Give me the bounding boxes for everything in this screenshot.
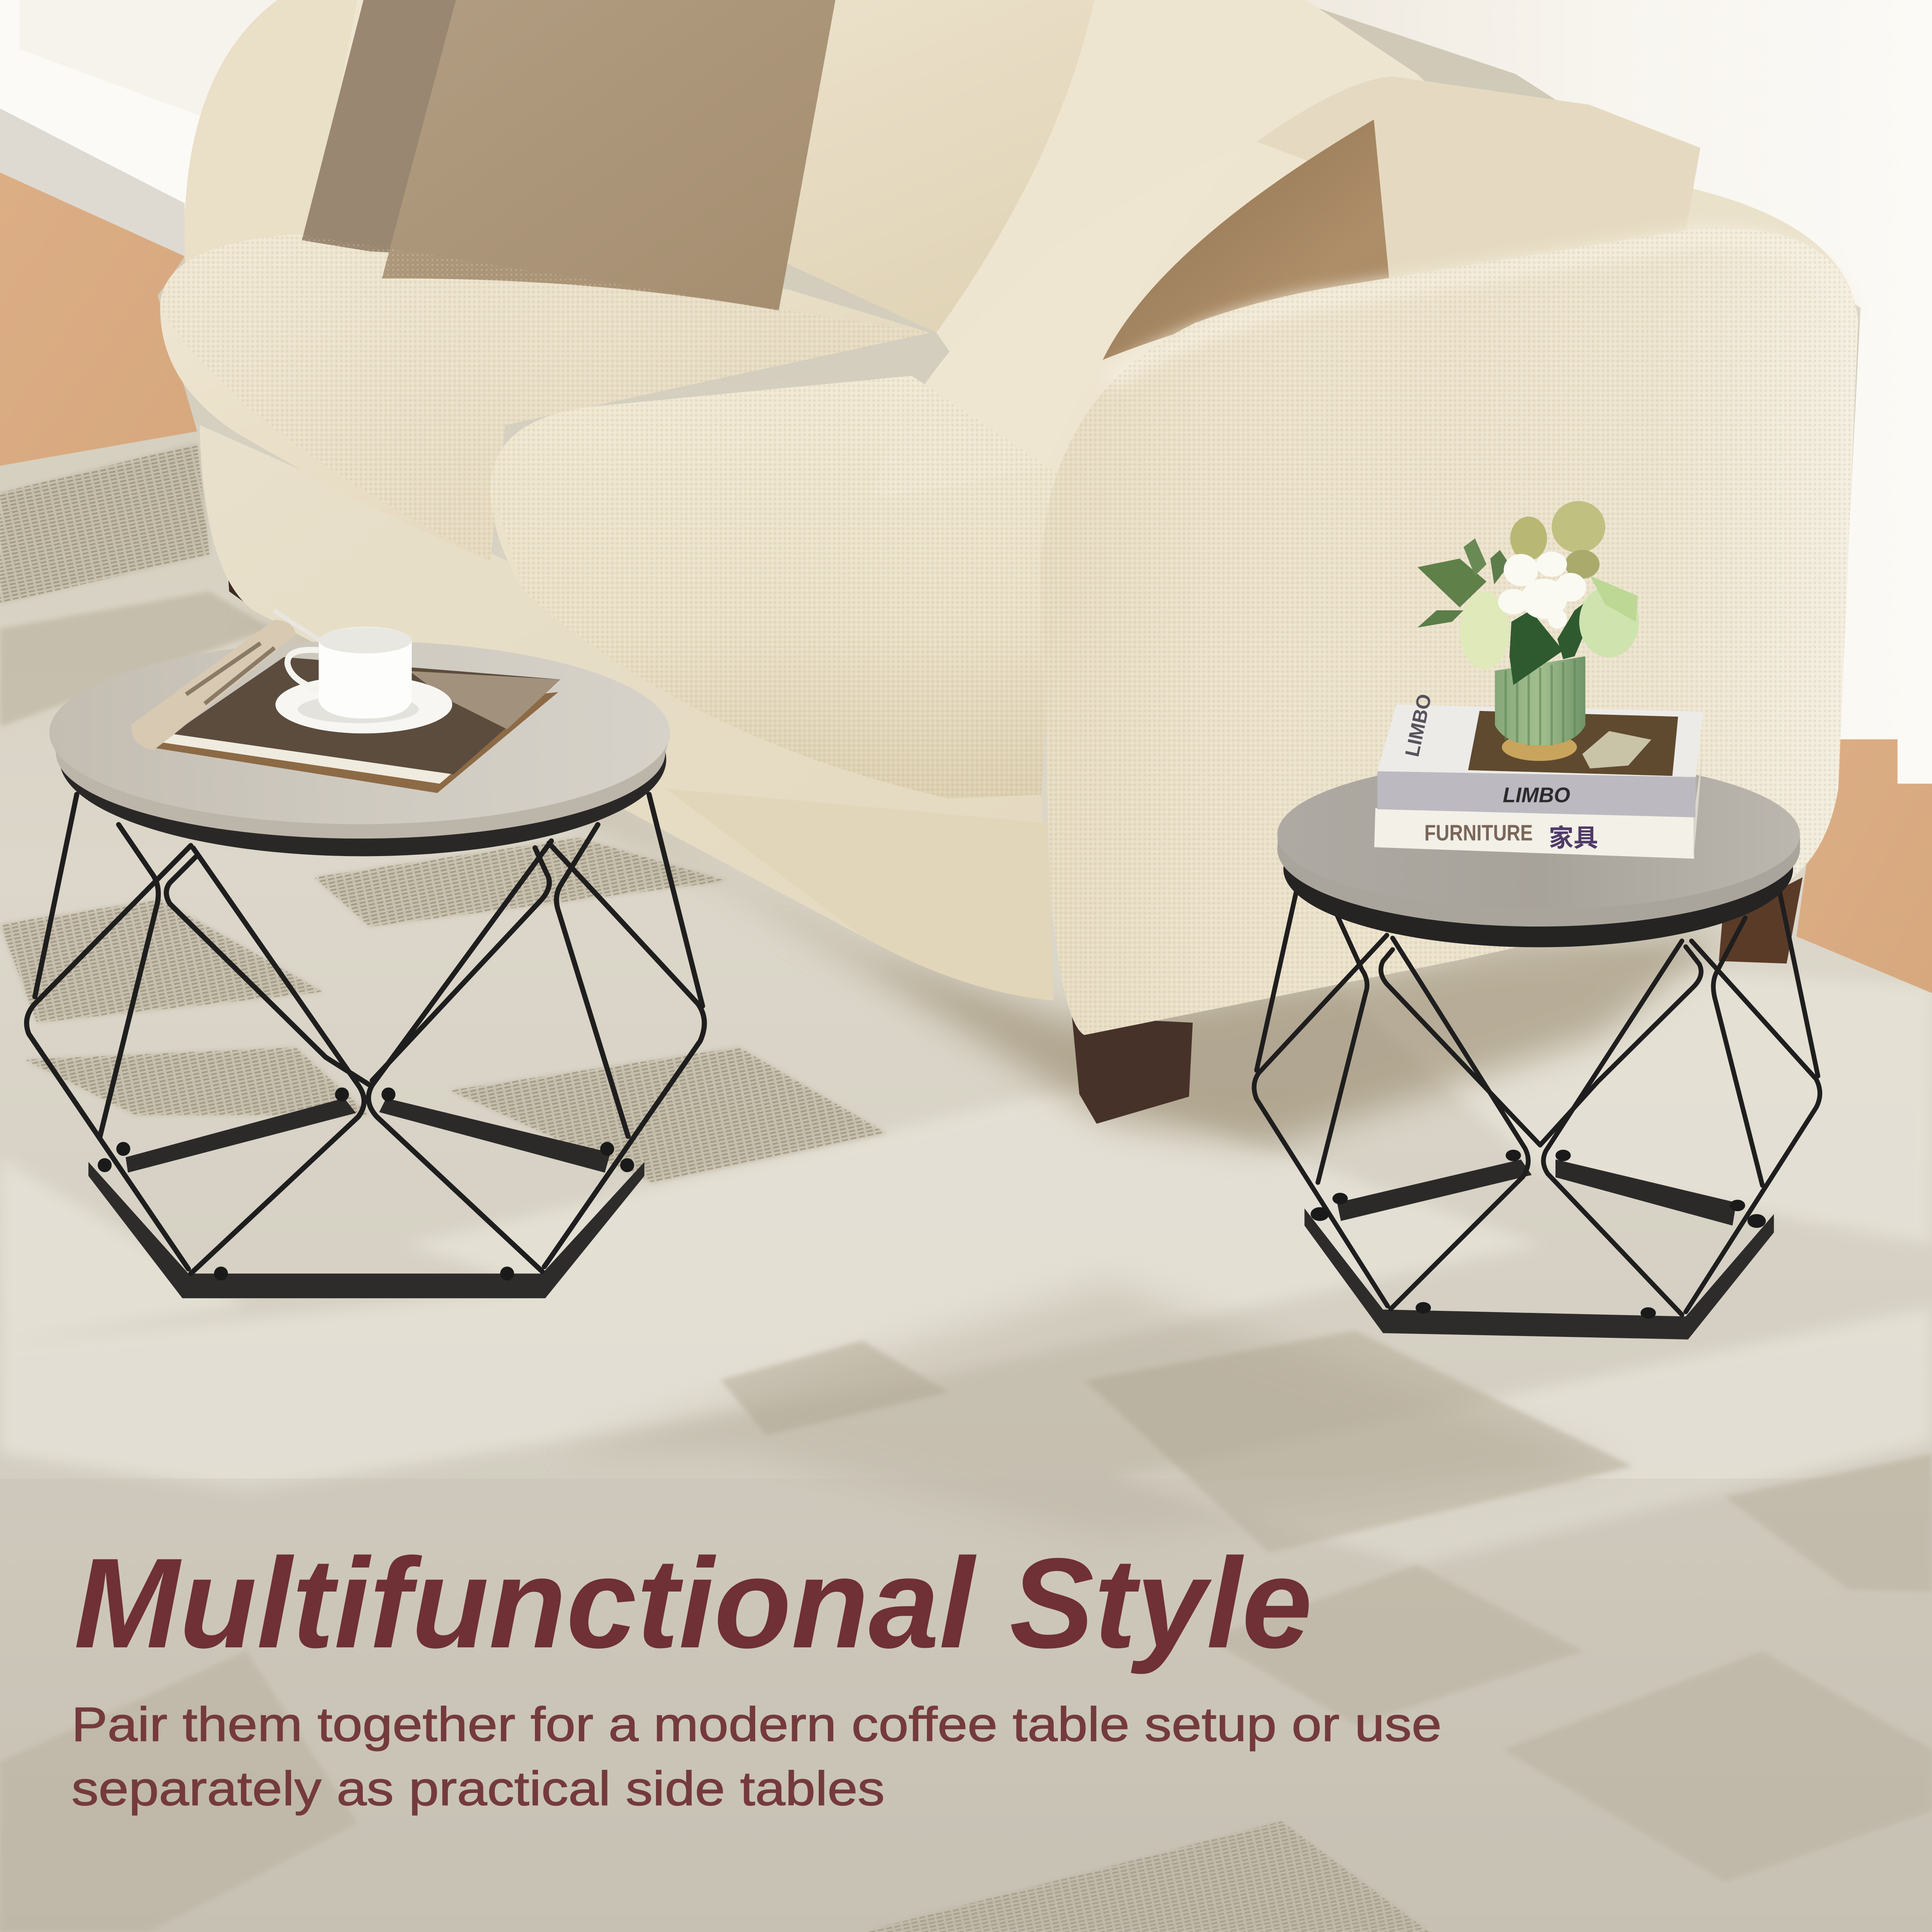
book spine text: LIMBO: LIMBO	[1503, 784, 1570, 807]
pillow: small brown left	[302, 0, 459, 252]
upper book	[1377, 705, 1704, 777]
sofa shadow on rug	[246, 604, 1725, 1540]
pillow: large tan	[382, 0, 835, 310]
sofa base	[200, 425, 1054, 1000]
left table rods	[27, 794, 705, 1273]
sofa back cushion left	[308, 0, 1094, 333]
left table ring	[60, 663, 666, 856]
white flowers	[1498, 552, 1586, 629]
right table bolts	[1311, 1150, 1766, 1319]
rug pattern patches	[0, 444, 1932, 1932]
wood floor right	[1796, 739, 1932, 993]
sofa left arm	[185, 0, 370, 296]
pillow: small brown right	[1103, 119, 1390, 360]
sofa	[160, 0, 1858, 1124]
body line 2: separately as practical side tables	[71, 1762, 885, 1815]
pillow: fluffy cream	[872, 146, 1247, 495]
sofa front arm	[1041, 228, 1858, 1035]
left table base	[27, 641, 705, 1298]
sofa foot: right rear	[1719, 877, 1803, 963]
sofa weave texture	[160, 228, 1858, 1035]
sofa back cushion right	[936, 0, 1602, 493]
sofa seat cushion right	[490, 376, 1060, 799]
sofa back-right arm	[1602, 185, 1858, 616]
left table top	[50, 644, 670, 838]
vase	[1502, 733, 1577, 761]
wall and window	[0, 0, 296, 259]
spoon	[276, 611, 335, 650]
magazine	[131, 611, 561, 793]
curtain	[1294, 0, 1932, 784]
green-white roses	[1460, 591, 1510, 669]
book spine text: FURNITURE: FURNITURE	[1425, 820, 1533, 845]
leaves	[1418, 559, 1486, 608]
right table ring	[1283, 791, 1793, 947]
book spine text: Chinese: 家具	[1549, 825, 1598, 852]
body line 1: Pair them together for a modern coffee table setup or use	[71, 1698, 1442, 1751]
sofa seat cushion left	[160, 234, 930, 561]
right table rods	[1254, 889, 1820, 1315]
left table bolts	[98, 1088, 634, 1281]
foliage sprigs	[1510, 516, 1547, 560]
cover image	[1468, 711, 1678, 776]
heading: Multifunctional Style	[74, 1532, 1312, 1675]
body text	[71, 1698, 1442, 1815]
book cover text: LIMBO: LIMBO	[1400, 692, 1436, 759]
right table	[1254, 501, 1820, 1340]
text area soft tint	[0, 1479, 1932, 1932]
lower book	[1374, 808, 1694, 859]
sofa foot: left	[228, 573, 259, 604]
magazine roll	[131, 620, 296, 750]
right table base	[1337, 1160, 1532, 1221]
left table	[27, 611, 705, 1298]
wood floor left	[0, 173, 197, 466]
saucer	[276, 676, 452, 733]
cream cushion back	[1257, 76, 1700, 286]
cup	[319, 627, 412, 719]
sofa foot: front	[1072, 1017, 1193, 1124]
right table top	[1278, 838, 1800, 923]
